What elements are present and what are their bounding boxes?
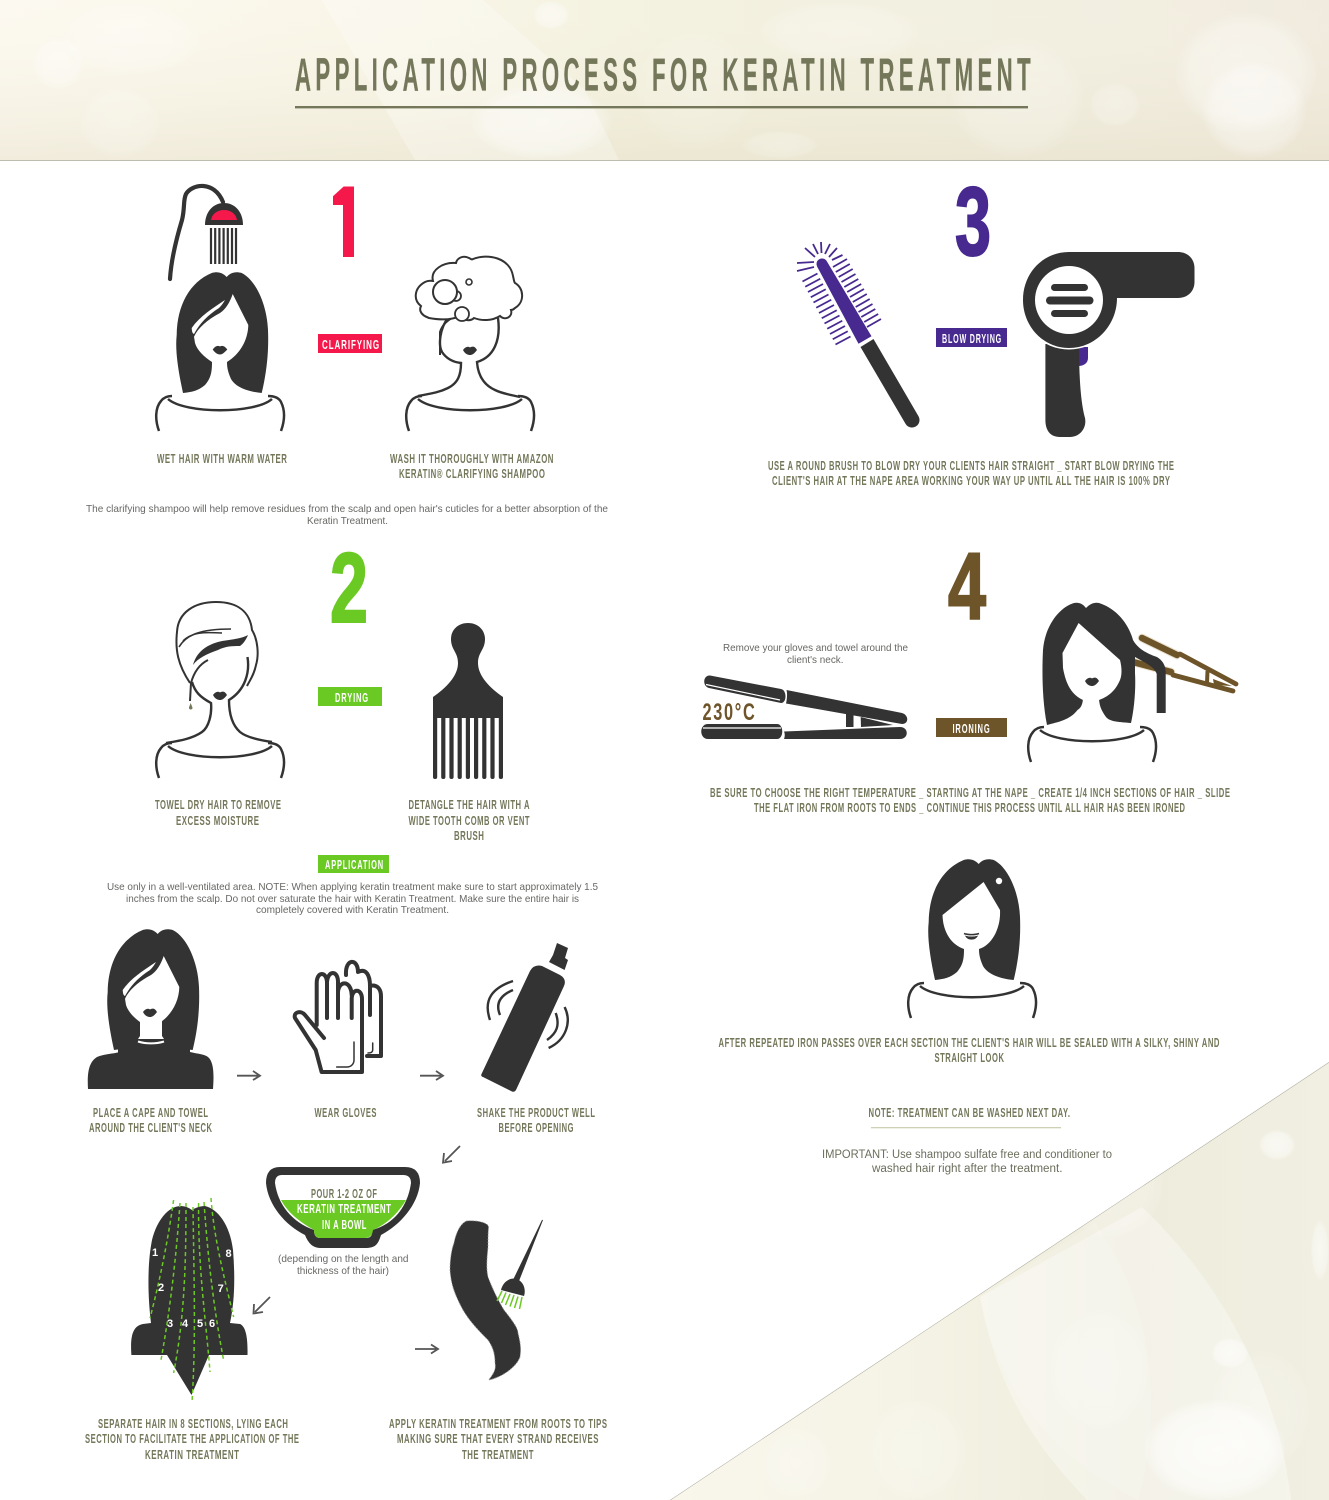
arrow — [237, 1071, 260, 1080]
caption: separate hair: SECTION TO FACILITATE THE APPLICATION OF THE — [85, 1431, 300, 1446]
icon: bowl with instruction text — [266, 1167, 420, 1248]
badge: application — [318, 855, 389, 873]
icon: hair separated in 8 sections — [131, 1198, 248, 1402]
icon: woman with shampoo foam — [406, 257, 534, 431]
badge: drying — [318, 687, 382, 706]
icon: flat iron — [701, 675, 907, 739]
caption: apply treatment: APPLY KERATIN TREATMENT FROM ROOTS TO TIPS — [389, 1416, 608, 1431]
number 2: 2 — [330, 532, 368, 643]
badge: clarifying — [318, 334, 382, 353]
icon: gloves — [295, 962, 381, 1072]
caption: shake: BEFORE OPENING — [498, 1120, 574, 1135]
number 4: 4 — [948, 534, 986, 640]
caption: towel dry: EXCESS MOISTURE — [176, 813, 260, 828]
caption: detangle: WIDE TOOTH COMB OR VENT — [408, 813, 530, 828]
caption: cape: AROUND THE CLIENT'S NECK — [89, 1120, 212, 1135]
note: remove gloves: client's neck. — [787, 654, 844, 666]
icon: round brush — [797, 242, 919, 427]
note: important: IMPORTANT: Use shampoo sulfate free and conditioner to — [822, 1149, 1112, 1161]
badge: clarifying: CLARIFYING — [322, 338, 380, 352]
caption: shake — [477, 1105, 596, 1135]
icon: hair separated in 8 sections: 2 — [158, 1282, 164, 1294]
caption: separate hair: KERATIN TREATMENT — [145, 1447, 240, 1462]
icon: shower and woman with wet hair — [156, 186, 284, 431]
caption: apply treatment — [389, 1416, 608, 1462]
icon: hair separated in 8 sections: 1 — [152, 1247, 158, 1259]
icon: bowl with instruction text: KERATIN TREATMENT — [297, 1201, 392, 1216]
icon: woman ironing hair — [1028, 603, 1236, 762]
note: bowl amount: thickness of the hair) — [297, 1265, 389, 1277]
caption: separate hair — [85, 1416, 300, 1462]
caption: gloves: WEAR GLOVES — [314, 1105, 377, 1120]
note: application: Use only in a well-ventilated area. NOTE: When applying keratin treatment make sure to start approximately 1.5 — [107, 881, 598, 893]
note: bowl amount: (depending on the length and — [278, 1253, 409, 1265]
badge: blow drying: BLOW DRYING — [942, 332, 1002, 346]
note: important: washed hair right after the treatment. — [871, 1163, 1062, 1175]
number 1: 1 — [326, 167, 368, 285]
arrow — [254, 1297, 270, 1314]
note: wash next day: NOTE: TREATMENT CAN BE WASHED NEXT DAY. — [868, 1105, 1070, 1120]
icon: woman with towel — [156, 602, 284, 778]
caption: apply treatment: MAKING SURE THAT EVERY STRAND RECEIVES — [397, 1431, 599, 1446]
caption: wet hair: WET HAIR WITH WARM WATER — [157, 451, 288, 466]
icon: hair separated in 8 sections: 6 — [209, 1318, 215, 1330]
note: important — [822, 1149, 1112, 1175]
note: application: completely covered with Keratin Treatment. — [256, 904, 449, 916]
caption: detangle: BRUSH — [454, 828, 484, 843]
caption: result: STRAIGHT LOOK — [934, 1050, 1004, 1065]
icon: hair strand and tint brush — [450, 1220, 542, 1380]
note: remove gloves — [723, 642, 908, 666]
note: remove gloves: Remove your gloves and towel around the — [723, 642, 908, 654]
icon: hair dryer — [1020, 250, 1194, 437]
note: application: inches from the scalp. Do not over saturate the hair with Keratin Treatment. Make sure the entire hair is — [126, 893, 579, 905]
note: clarifying shampoo: The clarifying shampoo will help remove residues from the scalp and open hair's cuticles for a better absorption of the — [86, 503, 608, 515]
caption: wash hair: KERATIN® CLARIFYING SHAMPOO — [399, 466, 546, 481]
badge: ironing: IRONING — [952, 722, 990, 736]
badge: blow drying — [936, 328, 1007, 347]
caption: detangle: DETANGLE THE HAIR WITH A — [408, 797, 530, 812]
icon: hair separated in 8 sections: 3 — [167, 1318, 173, 1330]
caption: separate hair: SEPARATE HAIR IN 8 SECTIONS, LYING EACH — [98, 1416, 288, 1431]
icon: hair separated in 8 sections: 4 — [182, 1318, 189, 1330]
caption: blow dry — [768, 458, 1174, 488]
badge: application: APPLICATION — [325, 858, 384, 872]
icon: hair separated in 8 sections: 7 — [218, 1283, 224, 1295]
decorative corner triangle — [670, 1062, 1329, 1500]
caption: result — [718, 1035, 1220, 1065]
badge: ironing — [936, 718, 1007, 737]
caption: cape — [89, 1105, 212, 1135]
icon: flat iron: 230°C — [702, 699, 756, 726]
header banner background — [0, 0, 1329, 161]
caption: towel dry — [155, 797, 282, 828]
caption: ironing — [710, 785, 1230, 815]
arrow — [420, 1071, 443, 1080]
icon: woman with cape — [88, 929, 213, 1089]
icon: shaking spray bottle — [481, 943, 568, 1092]
icon: wide tooth comb — [433, 623, 503, 779]
caption: wash hair — [390, 451, 554, 481]
note: clarifying shampoo — [86, 503, 608, 527]
badge: drying: DRYING — [335, 691, 369, 705]
icon: bowl with instruction text: IN A BOWL — [322, 1217, 367, 1232]
icon: hair separated in 8 sections: 8 — [226, 1248, 232, 1260]
caption: wash hair: WASH IT THOROUGHLY WITH AMAZON — [390, 451, 554, 466]
arrow — [443, 1146, 460, 1163]
note: bowl amount — [278, 1253, 409, 1277]
number 3: 3 — [955, 167, 991, 276]
caption: towel dry: TOWEL DRY HAIR TO REMOVE — [155, 797, 282, 812]
caption: cape: PLACE A CAPE AND TOWEL — [93, 1105, 208, 1120]
icon: woman with straight shiny hair — [908, 859, 1036, 1018]
icon: hair separated in 8 sections: 5 — [197, 1318, 203, 1330]
note: application — [107, 881, 598, 916]
caption: detangle — [408, 797, 530, 843]
note: clarifying shampoo: Keratin Treatment. — [307, 515, 388, 527]
caption: apply treatment: THE TREATMENT — [462, 1447, 534, 1462]
arrow — [415, 1344, 438, 1354]
caption: shake: SHAKE THE PRODUCT WELL — [477, 1105, 596, 1120]
icon: bowl with instruction text: POUR 1-2 OZ OF — [311, 1186, 378, 1201]
